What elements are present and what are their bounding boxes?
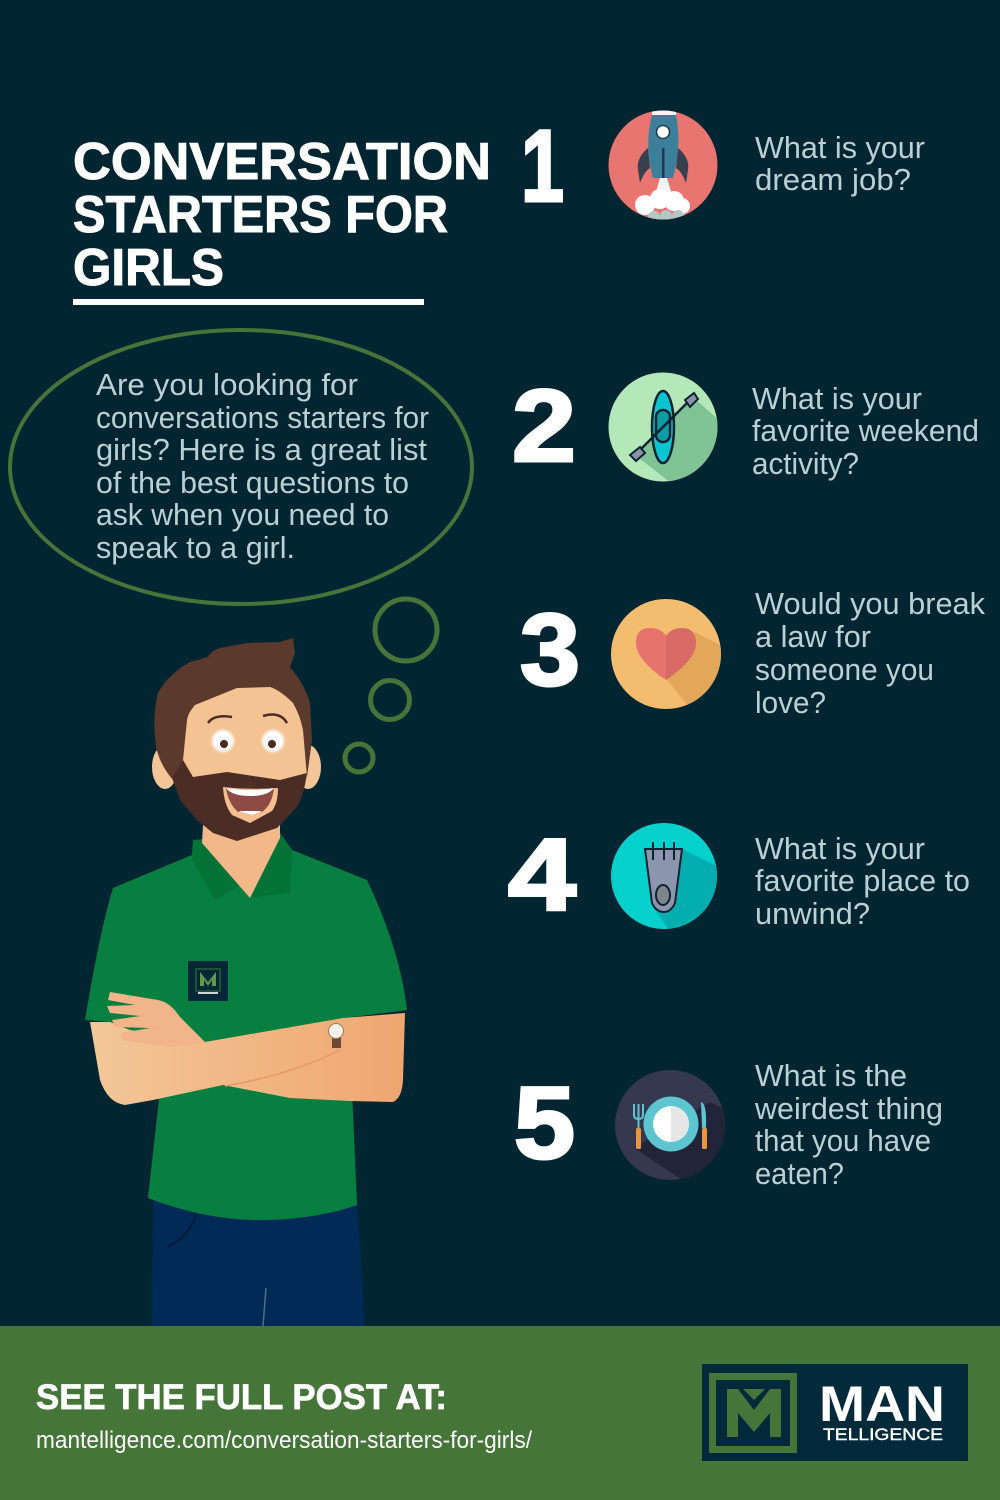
thought bubble with intro text: speak to a girl. [96, 530, 295, 565]
footer url: mantelligence.com/conversation-starters-for-girls/ [36, 1427, 532, 1454]
hair [154, 638, 312, 780]
mouth [223, 787, 278, 823]
item 4 number: 4 [508, 818, 576, 932]
item 4 text: unwind? [755, 896, 870, 931]
item 3 number: 3 [520, 593, 580, 707]
thought bubble with intro text [10, 330, 472, 604]
crossed arms [90, 992, 405, 1105]
footer band [0, 1326, 1000, 1500]
ears [152, 745, 321, 789]
beard [172, 760, 307, 841]
item 2 text: favorite weekend [752, 413, 979, 448]
item 5 number: 5 [514, 1066, 575, 1180]
footer heading: SEE THE FULL POST AT: [36, 1378, 447, 1417]
item 4 text: What is your [755, 831, 925, 866]
icon: heart [611, 599, 721, 709]
neck [202, 820, 280, 898]
title: STARTERS FOR [73, 186, 448, 244]
icon: plate and cutlery [615, 1070, 725, 1180]
thought bubble with intro text: ask when you need to [96, 497, 389, 532]
item 1 text: What is your [755, 130, 925, 165]
thought bubble with intro text: Are you looking for [96, 367, 358, 402]
title [73, 133, 491, 305]
item 3 text [755, 586, 985, 720]
logo [702, 1364, 968, 1461]
icon: kayak [608, 372, 718, 482]
item 3 text: a law for [755, 619, 871, 654]
logo: TELLIGENCE [823, 1425, 943, 1444]
item 5 text: What is the [755, 1058, 907, 1093]
trousers [152, 1200, 365, 1326]
item 2 number: 2 [512, 369, 576, 483]
item 3 text: love? [755, 685, 826, 720]
shirt badge logo [188, 961, 228, 1001]
item 4 text: favorite place to [755, 863, 970, 898]
item 1 number: 1 [521, 109, 564, 223]
icon: swim fin [611, 823, 717, 929]
item 2 text: What is your [752, 381, 922, 416]
icon: rocket [608, 110, 718, 224]
item 2 text: activity? [752, 446, 859, 481]
item 5 text: eaten? [755, 1156, 844, 1191]
title: GIRLS [73, 239, 224, 297]
item 5 text: that you have [755, 1123, 931, 1158]
item 1 text: dream job? [755, 162, 911, 197]
face [180, 680, 307, 825]
item 5 text: weirdest thing [754, 1091, 943, 1126]
shirt collar [192, 833, 292, 900]
item 3 text: Would you break [755, 586, 985, 621]
item 4 text [755, 831, 970, 931]
shirt [85, 833, 407, 1220]
logo: MAN [819, 1376, 945, 1432]
character illustration [85, 638, 407, 1326]
thought bubble circles [345, 599, 437, 772]
item 1 text [755, 130, 925, 197]
eyes [208, 715, 287, 752]
thought bubble with intro text: conversations starters for [96, 400, 429, 435]
item 5 text [754, 1058, 943, 1191]
item 3 text: someone you [755, 652, 934, 687]
title: CONVERSATION [73, 133, 491, 191]
item 2 text [752, 381, 979, 481]
wristwatch [328, 1024, 344, 1048]
thought bubble with intro text: of the best questions to [96, 465, 409, 500]
thought bubble with intro text: girls? Here is a great list [96, 432, 427, 467]
